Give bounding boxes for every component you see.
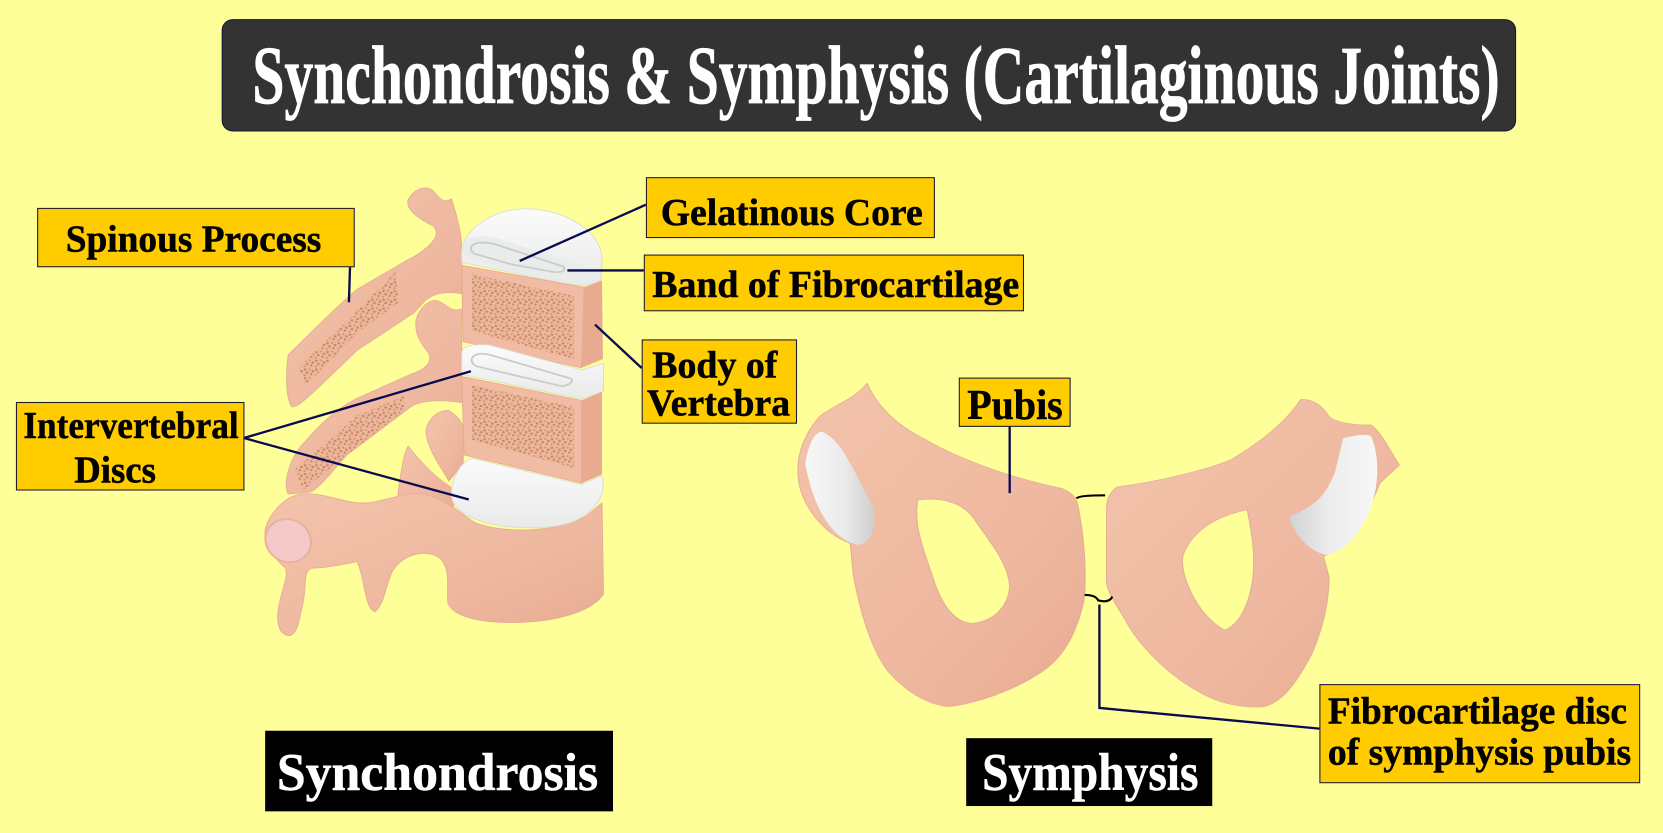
symphysis gap bracket: upper xyxy=(1076,495,1105,498)
label: gelatinous core: Gelatinous Core xyxy=(661,192,923,234)
illustration: pubic bones xyxy=(798,383,1399,707)
label: pubis: Pubis xyxy=(967,382,1063,429)
symphysis gap bracket: lower xyxy=(1085,595,1112,601)
label: gelatinous core xyxy=(520,178,934,261)
label: intervertebral discs: Intervertebral xyxy=(23,405,239,447)
label: body of vertebra: Vertebra xyxy=(647,383,790,425)
label: pubis xyxy=(959,378,1070,493)
label: band of fibrocartilage: Band of Fibrocartilage xyxy=(652,264,1019,306)
illustration: vertebral column section xyxy=(259,188,603,636)
panel: synchondrosis xyxy=(16,178,1023,811)
caption: synchondrosis xyxy=(265,731,613,811)
label: spinous process xyxy=(38,208,354,302)
panel: symphysis xyxy=(798,378,1640,806)
label: fibrocartilage disc xyxy=(1099,605,1640,783)
label: body of vertebra xyxy=(595,325,797,425)
label: body of vertebra: Body of xyxy=(652,345,779,387)
label: fibrocartilage disc: of symphysis pubis xyxy=(1328,732,1631,774)
label: spinous process: Spinous Process xyxy=(66,218,321,260)
label: band of fibrocartilage xyxy=(567,255,1023,311)
label: intervertebral discs xyxy=(16,371,471,500)
caption: synchondrosis: Synchondrosis xyxy=(277,744,598,802)
label: fibrocartilage disc: Fibrocartilage disc xyxy=(1328,690,1627,732)
label: intervertebral discs: Discs xyxy=(74,450,156,492)
caption: symphysis: Symphysis xyxy=(982,744,1198,802)
